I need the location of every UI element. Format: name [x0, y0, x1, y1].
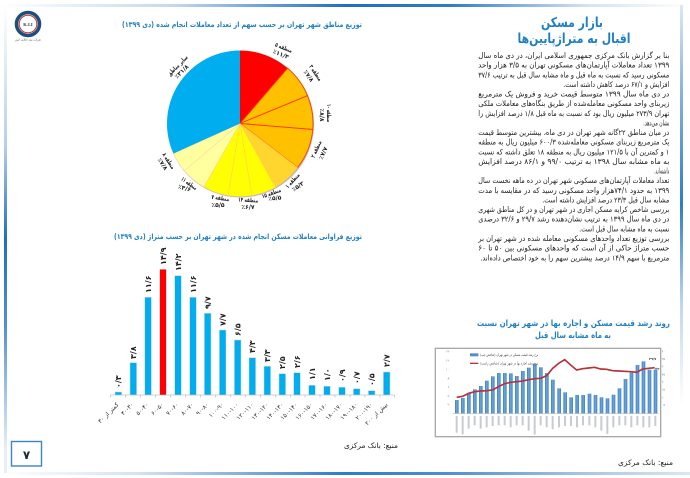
- bar values: ۹/۷: [204, 296, 212, 309]
- bar values: ۱/۰: [323, 368, 332, 381]
- price growth bars: [455, 361, 657, 413]
- left and right axis values: ۵: [663, 403, 665, 407]
- slice: district 15: [240, 124, 275, 196]
- pie labels: منطقه ۲: [310, 140, 324, 159]
- axis labels: ۱۴۰-۱۳۰: [265, 401, 285, 422]
- article body text: یک مترمربع زیربنای مسکونی معامله‌شده ۶۰۰/۳ میلیون ریال به منطقه: [478, 138, 669, 147]
- bar values: ۷/۷: [218, 313, 228, 326]
- article body text: افزایش و ۶۷/۱ درصد کاهش داشته است.: [563, 80, 669, 89]
- article body text: [477, 51, 670, 262]
- left and right axis values: ۱۵: [662, 388, 665, 392]
- page number box: [12, 442, 42, 466]
- left and right axis values: ۶۰: [447, 385, 451, 389]
- axis labels: ۶۰-۵۰: [150, 401, 165, 417]
- bar values: ۱/۱: [308, 367, 317, 380]
- axis labels: ۲۰۰-۱۹۰: [354, 401, 374, 422]
- pie labels: منطقه ۱۵: [261, 187, 282, 200]
- legend: [470, 353, 538, 366]
- callout values: [649, 357, 659, 371]
- pie labels: ٪۸/۸: [318, 108, 325, 122]
- axis: [110, 395, 394, 398]
- axis labels: ۱۷۰-۱۶۰: [309, 401, 329, 422]
- bar values: ۲/۶: [293, 355, 302, 368]
- left frame bar: [4, 5, 7, 473]
- logo: [15, 12, 41, 42]
- axis labels: ۱۱۰-۱۰۰: [220, 401, 240, 422]
- bar values: ۰/۷: [352, 371, 362, 384]
- axis labels: ۷۰-۶۰: [165, 401, 180, 417]
- pie labels: منطقه ۵: [274, 41, 293, 55]
- main heading: اقبال به متراژپایین‌ها: [518, 31, 630, 47]
- axis labels: ۱۹۰-۱۸۰: [339, 401, 359, 422]
- pie chart: Tehran districts: [167, 50, 314, 198]
- bar values: ۱۴/۲: [174, 253, 183, 271]
- pie chart title: توزیع مناطق شهر تهران بر حسب سهم از تعداد معاملات انجام شده (دی ۱۳۹۹): [122, 20, 362, 29]
- rent growth line: [457, 360, 655, 397]
- axis labels: ۱۲۰-۱۱۰: [235, 401, 255, 422]
- axis labels: ۵۰-۴۰: [135, 401, 150, 417]
- axis labels: ۸۰-۷۰: [180, 401, 195, 417]
- left and right axis values: ۸۰: [447, 376, 451, 380]
- right frame bar: [680, 5, 683, 405]
- left and right axis values: ۰: [449, 412, 451, 416]
- article body text: ۱ و کمترین آن با ۱۲۱/۵ میلیون ریال به منطقه ۱۸ تعلق داشته که نسبت: [478, 146, 669, 156]
- article body text: مشابه سال قبل ۲۳/۳ درصد افزایش داشته است.: [542, 196, 669, 204]
- left and right axis values: ۰: [663, 412, 665, 416]
- legend: نرخ رشد اجاره بها در شهر تهران (شاخص راست): [480, 362, 538, 366]
- article body text: در میان مناطق ۲۲گانه شهر تهران در دی ماه، بیشترین متوسط قیمت: [478, 128, 669, 137]
- baseline: [453, 413, 659, 415]
- article body text: ۱۳۹۹ تعداد معاملات آپارتمان‌های مسکونی تهران به ۳/۵ هزار واحد: [478, 60, 669, 70]
- main heading: بازار مسکن: [541, 15, 603, 31]
- article body text: تهران ۲۷۳/۹ میلیون ریال بود که نسبت به ماه قبل ۱/۸ درصد افزایش را: [478, 109, 669, 118]
- top frame bar: [0, 4, 690, 7]
- left and right axis values: ۱۴۰: [446, 349, 451, 353]
- bar chart: frequency by floor area: [97, 247, 395, 427]
- left and right axis values: ۱۰۰: [446, 367, 451, 371]
- pie labels: منطقه ۸: [160, 152, 176, 171]
- pie labels: سایر مناطق: [166, 54, 190, 78]
- pie labels: ٪۷/۷: [318, 146, 330, 161]
- axis labels: ۴۰-۳۰: [120, 401, 135, 417]
- combo chart title: [477, 319, 670, 341]
- bars: [115, 269, 390, 395]
- pie labels: ٪۷/۸: [156, 157, 169, 172]
- bar values: ۳/۸: [129, 346, 138, 359]
- callout values: ۳۲: [655, 367, 659, 371]
- bar values: ۰/۳: [114, 375, 123, 388]
- article body text: ۱۳۹۹ به حدود ۷۴/۱هزار واحد مسکونی رسید که در مقایسه با مدت: [478, 186, 669, 195]
- legend: نرخ رشد قیمت مسکن در شهر تهران (شاخص چپ): [480, 353, 538, 357]
- slice: other districts: [167, 50, 240, 154]
- pie labels: ٪۱۱/۳: [271, 48, 290, 61]
- slice: district 11: [184, 124, 240, 187]
- left and right axis values: ۱۰: [662, 395, 665, 399]
- left and right axis values: ۲۵: [662, 372, 665, 376]
- left and right axis values: [446, 349, 665, 416]
- logo: K.I.I: [23, 22, 33, 27]
- left and right axis values: ۳۵: [662, 357, 665, 361]
- article body text: مترمربع با سهم ۱۴/۹ درصد بیشترین سهم را به خود اختصاص داده‌اند.: [480, 253, 669, 262]
- pie labels: ٪۴/۶: [177, 183, 192, 194]
- axis labels: ۱۰۰-۹۰: [208, 401, 225, 419]
- article body text: نشان می‌دهد.: [643, 118, 669, 127]
- left and right axis values: ۲۰: [447, 403, 451, 407]
- article body text: بررسی توزیع تعداد واحدهای مسکونی معامله شده در شهر تهران بر: [477, 234, 669, 243]
- slice: district 7: [204, 124, 240, 196]
- axis labels: ۱۸۰-۱۷۰: [324, 401, 344, 422]
- axis labels: [97, 401, 390, 427]
- bar chart title: توزیع فراوانی معاملات مسکن انجام شده در شهر تهران بر حسب متراژ (دی ۱۳۹۹): [114, 232, 362, 241]
- pie labels: منطقه ۳: [307, 64, 323, 83]
- page number box: ۷: [23, 448, 31, 462]
- main heading: [518, 15, 630, 47]
- bar values: ۱۱/۶: [144, 275, 153, 293]
- combo chart title: به ماه مشابه سال قبل: [535, 331, 611, 341]
- logo: شرکت بیمه اتکایی امین: [15, 38, 41, 42]
- article body text: نسبت به ماه مشابه سال قبل است.: [579, 224, 669, 233]
- bar values: ۴/۳: [248, 340, 257, 353]
- callout values: ۲۹/۷: [649, 357, 656, 361]
- pie labels: منطقه ۱۰: [325, 104, 332, 122]
- pie labels: ٪۷/۸: [302, 69, 315, 84]
- pie labels: ٪۵/۳: [291, 180, 306, 193]
- bar values: ۱۴/۹: [159, 247, 168, 265]
- pie labels: منطقه ۱: [284, 172, 302, 190]
- bar values: ۰/۹: [338, 369, 347, 382]
- month labels: [456, 416, 656, 435]
- bar values: ۲/۷: [382, 354, 392, 367]
- left and right axis values: ۴۰: [447, 394, 451, 398]
- bar values: ۳/۳: [263, 349, 272, 362]
- article body text: در دی ماه سال ۱۳۹۹ به ترتیب نشان‌دهنده رشد ۲۹/۷ و ۳۲/۶ درصدی: [478, 215, 669, 224]
- slice: district 5: [240, 50, 288, 124]
- article body text: در دی ماه سال ۱۳۹۹ متوسط قیمت خرید و فروش یک مترمربع: [478, 90, 669, 98]
- bottom frame bar: [0, 472, 690, 475]
- bar values: [114, 247, 392, 388]
- bar values: ۱۱/۶: [189, 275, 198, 293]
- left and right axis values: ۱۲۰: [446, 358, 451, 362]
- bar values: ۲/۵: [278, 356, 287, 369]
- article body text: حسب متراژ حاکی از آن است که واحدهای مسکونی بین ۵۰ تا ۶۰: [478, 243, 670, 253]
- pie labels: ٪۵/۵: [268, 194, 282, 203]
- axis labels: کمتر از ۳۰: [97, 401, 121, 425]
- pie labels: ٪۵/۵: [211, 202, 225, 209]
- axis labels: بیش از ۲۰۰: [364, 401, 390, 427]
- axis labels: ۱۵۰-۱۴۰: [279, 401, 299, 422]
- slice: district 14: [228, 124, 252, 196]
- source: combo chart: منبع: بانک مرکزی: [618, 458, 673, 467]
- combo chart: price and rent growth: [435, 348, 665, 437]
- pie labels: منطقه ۱۴: [238, 196, 258, 205]
- slice: district 1: [240, 124, 298, 187]
- axis labels: ۱۶۰-۱۵۰: [294, 401, 314, 422]
- left and right axis values: ۳۰: [662, 365, 665, 369]
- left and right axis values: ۴۰: [662, 349, 665, 353]
- article body text: داشته‌اند.: [654, 167, 669, 176]
- pie labels: ٪۳۱/۸: [174, 63, 191, 80]
- article body text: بنا بر گزارش بانک مرکزی جمهوری اسلامی ایران، در دی ماه سال: [478, 51, 669, 60]
- pie labels: ٪۶/۷: [241, 204, 255, 211]
- pie labels: منطقه ۱۱: [179, 176, 198, 192]
- axis labels: ۱۳۰-۱۲۰: [250, 401, 270, 422]
- pie labels: [156, 41, 332, 211]
- article body text: زیربنای واحد مسکونی معامله‌شده از طریق بنگاه‌های معاملات ملکی: [478, 99, 670, 108]
- axis labels: ۹۰-۸۰: [195, 401, 210, 417]
- slice: district 8: [174, 124, 240, 171]
- bar values: ۶/۵: [234, 323, 242, 336]
- bar values: ۰/۵: [368, 373, 376, 386]
- slice: district 10: [240, 96, 313, 130]
- slice: district 2: [240, 124, 313, 168]
- slice: district 3: [240, 68, 308, 124]
- source: bar chart: منبع: بانک مرکزی: [344, 441, 398, 450]
- pie labels: منطقه ۷: [211, 194, 230, 203]
- left and right axis values: ۲۰: [662, 380, 665, 384]
- article body text: به ماه مشابه سال ۱۳۹۸ به ترتیب ۹۹/۰ و ۸۶/۱ درصد افزایش: [478, 157, 669, 166]
